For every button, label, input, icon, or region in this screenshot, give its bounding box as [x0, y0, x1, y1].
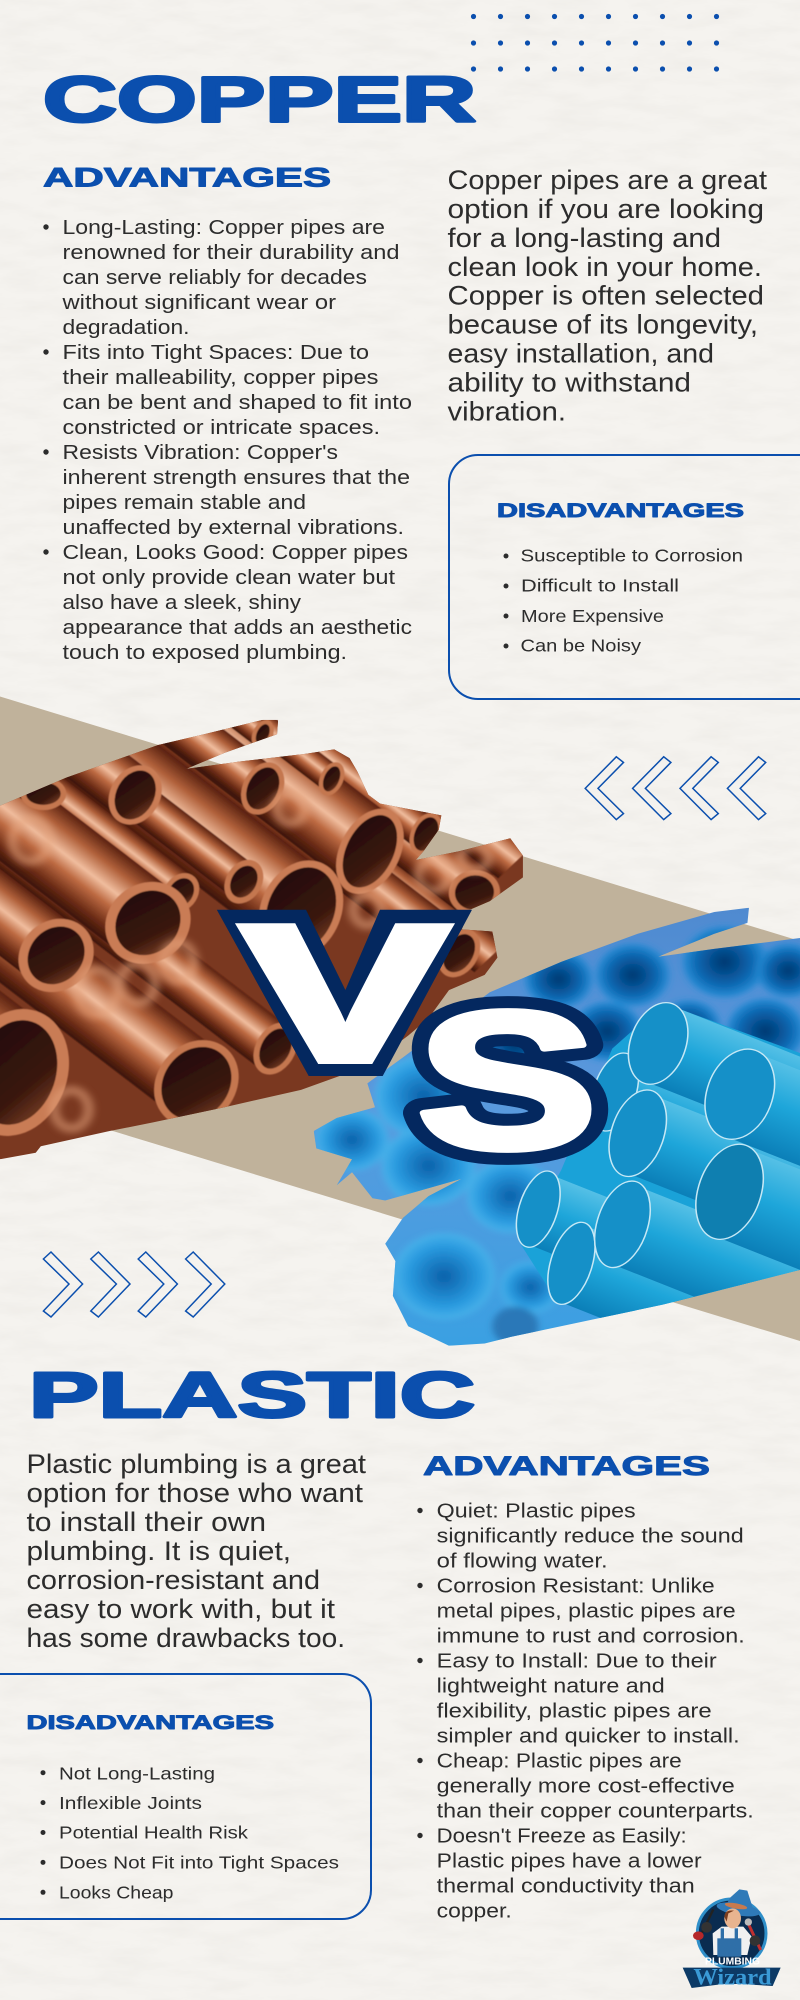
- list: plastic advantages: metal pipes, plastic pipes are: [437, 1600, 736, 1623]
- list: plastic advantages: Plastic pipes have a lower: [437, 1850, 702, 1873]
- list: plastic disadvantages: Not Long-Lasting: [59, 1763, 215, 1783]
- list: copper advantages: degradation.: [62, 316, 190, 339]
- list: copper advantages: Long-Lasting: Copper pipes are: [62, 216, 385, 239]
- list: plastic advantages: Easy to Install: Due to their: [437, 1650, 717, 1673]
- text block: copper intro: for a long-lasting and: [448, 223, 721, 253]
- list: copper disadvantages: [504, 546, 743, 656]
- text block: copper intro: option if you are looking: [448, 194, 764, 224]
- list: plastic advantages: flexibility, plastic pipes are: [437, 1700, 712, 1723]
- list: copper advantages: inherent strength ensures that the: [62, 466, 410, 489]
- title: plastic: PLASTIC: [29, 1359, 475, 1431]
- list: copper disadvantages: Susceptible to Corrosion: [520, 546, 743, 566]
- text block: copper intro: ability to withstand: [448, 368, 691, 398]
- chevrons: pointing right: [43, 1252, 225, 1317]
- list: plastic advantages: significantly reduce the sound: [437, 1525, 744, 1548]
- list: plastic advantages: generally more cost-effective: [437, 1775, 735, 1798]
- list: copper advantages: constricted or intricate spaces.: [62, 416, 380, 439]
- list: plastic disadvantages: [40, 1763, 339, 1902]
- list: plastic advantages: Corrosion Resistant: Unlike: [437, 1575, 715, 1598]
- list: plastic advantages: simpler and quicker to install.: [437, 1725, 740, 1748]
- list: plastic disadvantages: Potential Health Risk: [59, 1823, 248, 1843]
- text block: plastic intro: [26, 1449, 367, 1653]
- list: copper advantages: pipes remain stable and: [62, 491, 306, 514]
- text block: copper intro: easy installation, and: [448, 338, 714, 368]
- list: copper advantages: Fits into Tight Spaces: Due to: [62, 341, 369, 364]
- logo wordmark: PLUMBING: PLUMBING: [705, 1957, 760, 1968]
- photo: copper pipes: [0, 720, 523, 1160]
- logo wordmark: Wizard: Wizard: [693, 1965, 772, 1991]
- list: plastic advantages: [417, 1500, 754, 1923]
- text block: copper intro: [448, 165, 768, 426]
- list: copper advantages: Resists Vibration: Copper's: [62, 441, 338, 464]
- heading: copper disadvantages: DISADVANTAGES: [497, 500, 744, 522]
- list: copper advantages: can serve reliably for decades: [62, 266, 367, 289]
- text block: copper intro: because of its longevity,: [448, 310, 758, 340]
- panel: copper disadvantages: [449, 455, 800, 699]
- list: copper disadvantages: Difficult to Install: [521, 576, 679, 596]
- blurred reflection highlights on copper: [12, 792, 489, 1128]
- list: plastic advantages: thermal conductivity than: [437, 1875, 695, 1898]
- list: plastic advantages: lightweight nature and: [437, 1675, 665, 1698]
- dot pattern: [471, 14, 719, 72]
- text block: plastic intro: option for those who want: [26, 1478, 364, 1508]
- list: copper advantages: [43, 216, 412, 664]
- list: copper advantages: not only provide clean water but: [62, 566, 395, 589]
- list: plastic advantages: immune to rust and corrosion.: [437, 1625, 745, 1648]
- text block: plastic intro: Plastic plumbing is a great: [26, 1449, 367, 1479]
- VS lettering: V: [242, 885, 448, 1101]
- logo: Plumbing Wizard: [683, 1889, 781, 1991]
- list: plastic disadvantages: Inflexible Joints: [59, 1793, 202, 1813]
- list: plastic advantages: copper.: [437, 1900, 512, 1923]
- text block: plastic intro: plumbing. It is quiet,: [26, 1536, 291, 1566]
- list: plastic advantages: Cheap: Plastic pipes are: [437, 1750, 682, 1773]
- list: copper advantages: can be bent and shaped to fit into: [62, 391, 412, 414]
- text block: plastic intro: corrosion-resistant and: [26, 1565, 320, 1595]
- list: plastic advantages: of flowing water.: [437, 1550, 608, 1573]
- text block: plastic intro: to install their own: [26, 1507, 266, 1537]
- copper pipe ends, farthest first: [427, 812, 523, 878]
- list: copper advantages: renowned for their durability and: [62, 241, 400, 264]
- VS lettering: S: [416, 971, 598, 1190]
- photo: blue plastic pipes: [314, 908, 800, 1346]
- list: copper disadvantages: More Expensive: [521, 606, 664, 626]
- text block: copper intro: Copper is often selected: [448, 280, 764, 310]
- blurred background pipe holes: [315, 926, 800, 1346]
- VS lettering: [217, 885, 598, 1190]
- text block: copper intro: Copper pipes are a great: [448, 165, 768, 195]
- list: plastic advantages: than their copper counterparts.: [437, 1800, 754, 1823]
- list: copper advantages: appearance that adds an aesthetic: [62, 616, 412, 639]
- list: copper advantages: their malleability, copper pipes: [62, 366, 378, 389]
- list: copper advantages: unaffected by external vibrations.: [62, 516, 404, 539]
- list: plastic advantages: Doesn't Freeze as Easily:: [437, 1825, 687, 1848]
- text block: plastic intro: easy to work with, but it: [26, 1594, 336, 1624]
- list: plastic disadvantages: Does Not Fit into Tight Spaces: [59, 1853, 339, 1873]
- text block: copper intro: clean look in your home.: [448, 252, 762, 282]
- VS lettering: S: [416, 971, 598, 1190]
- tan diagonal band: [0, 696, 800, 1341]
- list: plastic advantages: Quiet: Plastic pipes: [437, 1500, 636, 1523]
- title: copper: COPPER: [43, 64, 476, 136]
- list: copper advantages: touch to exposed plumbing.: [62, 641, 347, 664]
- text block: plastic intro: has some drawbacks too.: [26, 1623, 345, 1653]
- list: copper advantages: also have a sleek, shiny: [62, 591, 302, 614]
- list: copper advantages: Clean, Looks Good: Copper pipes: [62, 541, 408, 564]
- list: copper disadvantages: Can be Noisy: [520, 636, 641, 656]
- heading: copper advantages: ADVANTAGES: [43, 162, 331, 192]
- heading: plastic advantages: ADVANTAGES: [423, 1451, 710, 1481]
- list: copper advantages: without significant wear or: [61, 291, 336, 314]
- foreground pipes: [516, 1002, 800, 1318]
- list: plastic disadvantages: Looks Cheap: [59, 1882, 174, 1902]
- heading: plastic disadvantages: DISADVANTAGES: [26, 1712, 274, 1734]
- text block: copper intro: vibration.: [448, 396, 566, 426]
- chevrons: pointing left: [585, 757, 766, 820]
- panel: plastic disadvantages: [0, 1674, 371, 1919]
